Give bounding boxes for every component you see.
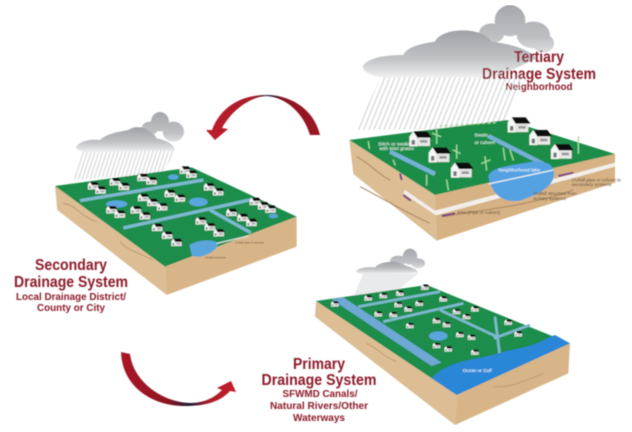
outfall labels: Outfall pipe to primary	[235, 240, 265, 244]
arrow: secondary to primary	[121, 352, 236, 406]
rain: secondary	[73, 150, 175, 180]
small labels: or culvert	[474, 140, 495, 146]
panel: primary drainage system	[315, 249, 570, 425]
ocean or gulf	[432, 335, 570, 395]
block side faces	[349, 140, 615, 241]
outfall labels: Outfall structure	[205, 255, 226, 259]
small labels: Swale,	[474, 133, 489, 139]
outfall labels	[205, 236, 265, 259]
panel: tertiary drainage system	[349, 5, 621, 241]
heading: primary: Natural Rivers/Other	[270, 400, 368, 412]
green ground	[316, 285, 570, 395]
canals	[390, 136, 543, 174]
heading: primary: Waterways	[293, 412, 345, 424]
ocean or gulf: Ocean or Gulf	[463, 368, 492, 373]
panel: secondary drainage system	[55, 112, 297, 295]
small labels: Outfall structure from	[533, 191, 577, 196]
houses	[409, 117, 574, 178]
block side faces	[55, 186, 297, 295]
heading: primary: SFWMD Canals/	[282, 388, 358, 400]
neighborhood lake	[488, 162, 554, 201]
plants	[368, 123, 578, 190]
river	[332, 297, 442, 366]
heading: secondary: Drainage System	[14, 274, 128, 291]
ponds	[106, 174, 278, 257]
block side faces	[315, 301, 570, 425]
heading: secondary	[14, 257, 128, 314]
heading: secondary: County or City	[37, 302, 105, 314]
heading: secondary: Local Drainage District/	[16, 291, 126, 303]
green ground	[349, 120, 615, 195]
houses	[331, 285, 523, 355]
canals	[80, 180, 257, 233]
canals	[358, 292, 530, 357]
green ground	[55, 167, 297, 267]
houses	[88, 166, 277, 246]
arrow: tertiary to secondary	[206, 95, 320, 140]
heading: primary: Drainage System	[262, 372, 376, 389]
cloud: primary	[356, 249, 425, 274]
heading: secondary: Secondary	[35, 257, 107, 274]
heading: tertiary	[482, 49, 596, 93]
small labels: with inlet grates	[379, 146, 414, 152]
cloud: secondary	[76, 112, 184, 152]
small labels: tertiary systems	[533, 196, 567, 201]
heading: tertiary: Tertiary	[514, 49, 564, 66]
cloud: tertiary	[363, 5, 554, 77]
small labels: Inlet (Pipe or culvert)	[457, 210, 501, 215]
heading: tertiary: Drainage System	[482, 66, 596, 83]
pond	[429, 331, 448, 341]
small labels: Ditch or swale	[378, 141, 410, 147]
heading: primary	[262, 356, 376, 424]
small labels: Outfall pipe or culvert to	[572, 178, 621, 183]
heading: primary: Primary	[293, 356, 345, 373]
rain: tertiary	[357, 75, 527, 130]
small labels: secondary systems	[572, 182, 612, 187]
heading: tertiary: Neighborhood	[506, 81, 572, 93]
rain: primary	[353, 273, 418, 297]
small labels: Neighborhood lake	[498, 168, 540, 174]
small labels	[378, 133, 621, 215]
